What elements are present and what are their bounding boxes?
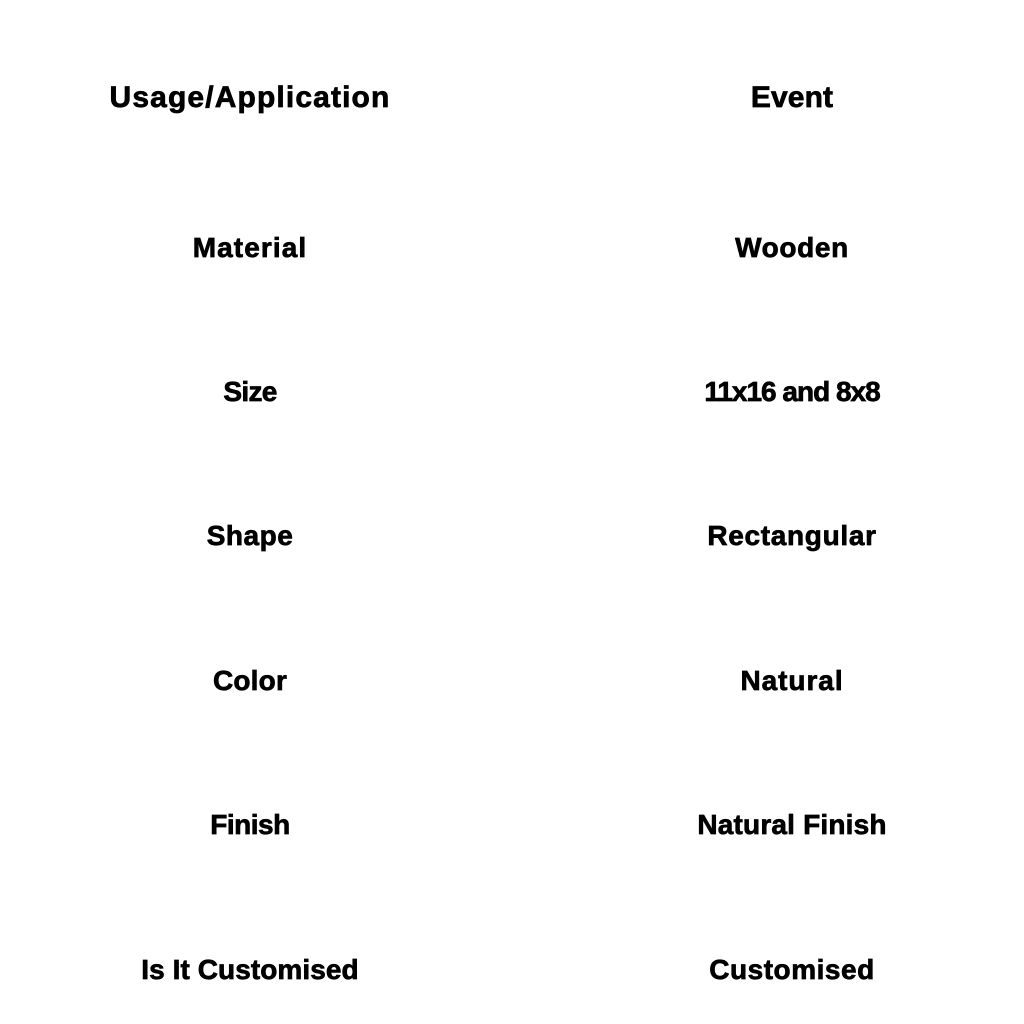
value: finish: Natural Finish <box>697 809 887 840</box>
label: color: Color <box>213 665 287 696</box>
value: customised: Customised <box>709 954 875 985</box>
label: size: Size <box>223 376 277 407</box>
value: shape: Rectangular <box>707 520 877 551</box>
label: shape: Shape <box>207 520 293 551</box>
heading: usage/application label: Usage/Application <box>110 81 390 114</box>
label: finish: Finish <box>210 809 290 840</box>
value: size: 11x16 and 8x8 <box>704 376 880 407</box>
value: material: Wooden <box>735 232 849 263</box>
value: color: Natural <box>740 665 844 696</box>
heading: usage/application value: Event <box>751 81 833 114</box>
label: material: Material <box>193 232 307 263</box>
label: is it customised: Is It Customised <box>141 954 359 985</box>
